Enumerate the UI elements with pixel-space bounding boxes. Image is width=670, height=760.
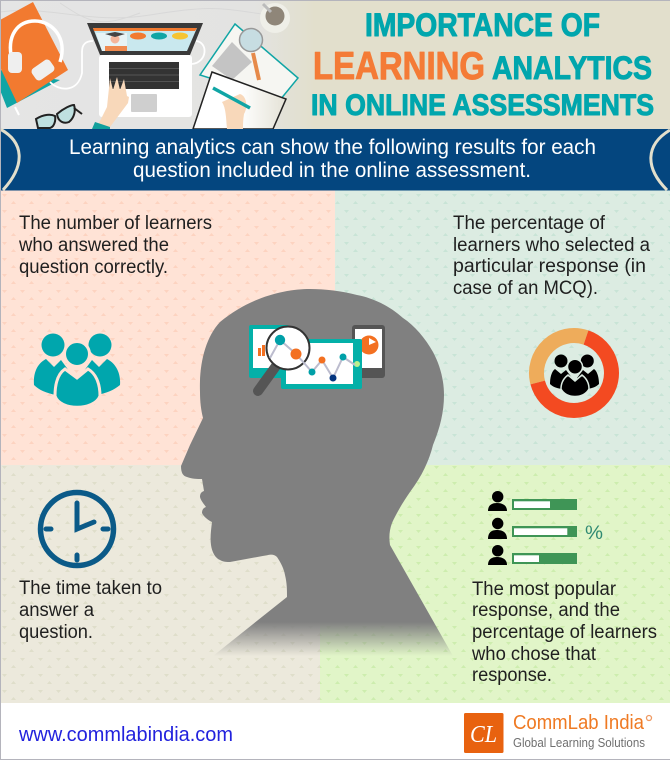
icon: response bars with learners <box>488 491 603 565</box>
text: most popular response: who chose that <box>471 644 597 665</box>
text: most popular response <box>471 579 657 686</box>
logo: CommLab India: CommLab India <box>513 712 645 734</box>
panel: bottom left beige background <box>0 465 320 703</box>
icon: donut chart with group <box>536 336 611 411</box>
panel: top right green background <box>335 190 670 466</box>
text: time taken: answer a <box>19 600 94 621</box>
icon: headphones <box>8 21 205 89</box>
logo: CommLab India <box>464 712 652 753</box>
text: most popular response: response. <box>472 665 552 686</box>
text: percentage selecting a response <box>453 213 650 299</box>
logo: CommLab India: Global Learning Solutions <box>513 736 645 750</box>
text: percentage selecting a response: learners who selected a <box>453 235 650 256</box>
icon: response bars with learners: % <box>585 523 603 544</box>
panel: bottom right light green background <box>320 465 670 703</box>
intro banner: Learning analytics can show the following results for each <box>69 136 596 159</box>
icon: laptop <box>87 23 203 117</box>
icon: notebook and writing hand <box>193 72 286 129</box>
header illustration: desk with laptop <box>0 0 670 130</box>
intro banner: question included in the online assessment. <box>133 159 531 182</box>
title: LEARNING <box>313 45 485 88</box>
text: learners who answered correctly: The number of learners <box>19 213 212 234</box>
text: learners who answered correctly <box>18 213 212 278</box>
footer <box>0 703 670 760</box>
icon: glasses <box>36 105 82 128</box>
text: percentage selecting a response: case of an MCQ). <box>453 278 598 299</box>
text: time taken: question. <box>19 622 93 643</box>
icon: line chart screen <box>281 339 362 389</box>
icon: group of learners <box>34 334 120 407</box>
website link: www.commlabindia.com <box>18 724 233 746</box>
text: learners who answered correctly: who answered the <box>18 235 169 256</box>
text: most popular response: response, and the <box>472 600 620 621</box>
title <box>311 7 654 122</box>
text: percentage selecting a response: The percentage of <box>453 213 606 234</box>
text: percentage selecting a response: particular response (in <box>453 256 646 277</box>
icon: bar chart screen <box>249 325 289 378</box>
logo: CommLab India: CL <box>470 722 497 748</box>
icon: magnifying glass <box>258 326 310 391</box>
icon: clock <box>40 492 114 566</box>
icon: coffee cup <box>260 3 290 33</box>
line graph <box>270 335 355 382</box>
icon: books <box>0 2 68 115</box>
panel: top left pink background <box>0 190 335 466</box>
head silhouette <box>181 289 453 656</box>
text: learners who answered correctly: question correctly. <box>19 257 168 278</box>
icon: tablet with pie chart <box>352 325 385 378</box>
title: ANALYTICS <box>492 50 652 86</box>
icon: typing hand <box>92 77 129 129</box>
text: most popular response: percentage of learners <box>472 622 657 643</box>
text: time taken: The time taken to <box>19 578 162 599</box>
analytics charts inside head <box>249 325 385 391</box>
title: IMPORTANCE OF <box>365 7 600 43</box>
icon: open book and magnifier <box>200 24 298 100</box>
text: most popular response: The most popular <box>472 579 617 600</box>
intro banner <box>0 129 670 190</box>
text: time taken <box>19 578 162 643</box>
